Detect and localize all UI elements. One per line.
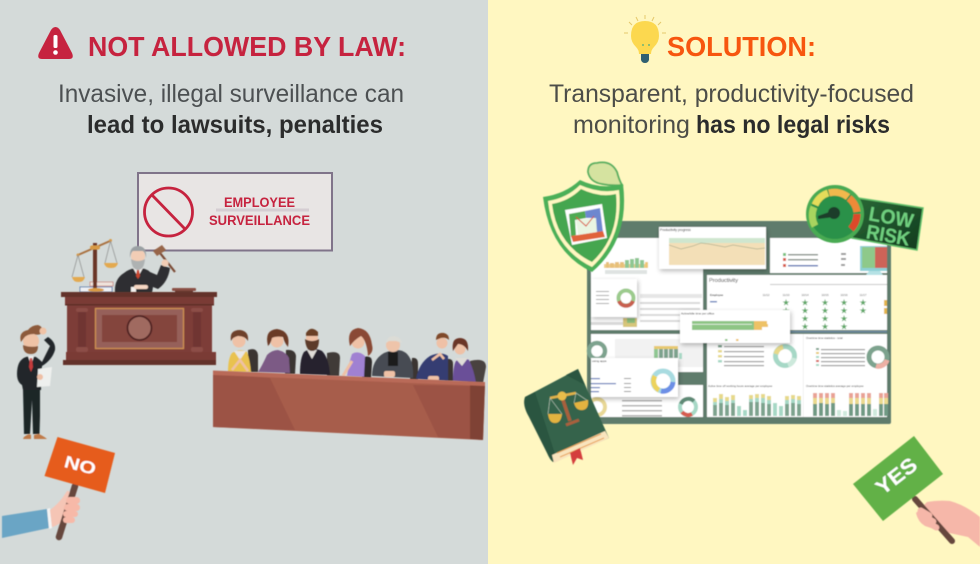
panel: productivity table: ★: [821, 306, 829, 316]
panel: productivity table: 11/12: [763, 293, 770, 297]
illustration: jury members: [228, 328, 486, 383]
panel: productivity table: 10/15: [822, 293, 829, 297]
panel: productivity table: ★: [782, 298, 790, 308]
panel: productivity table: ★: [801, 322, 809, 332]
panel: productivity table: Employee: [710, 293, 724, 297]
panel: productivity table: ★: [821, 314, 829, 324]
panel: productivity table: 11/17: [860, 293, 867, 297]
panel: not allowed by law: [0, 0, 488, 564]
icon: monitor: [860, 246, 887, 275]
illustration: confused man: [17, 325, 55, 439]
panel: productivity table: [707, 275, 887, 334]
panel: lower right charts: Active time off working hours average per employee: [708, 384, 773, 388]
sign: no: [2, 437, 115, 538]
sign: yes: YES: [871, 453, 922, 500]
badge: low risk: RISK: [864, 221, 912, 251]
icon: gold scales: [548, 392, 588, 425]
sign: employee surveillance: [138, 173, 332, 250]
sign: employee surveillance: EMPLOYEE: [224, 195, 295, 210]
text: transparent monitoring: Transparent, productivity-focused: [549, 80, 914, 108]
panel: productivity table: ★: [859, 298, 867, 308]
panel: lower right charts: [707, 334, 887, 417]
panel: solution: [488, 0, 980, 564]
panel: productivity table: ★: [801, 306, 809, 316]
panel: lower right charts: Overtime time statistics average per employee: [806, 384, 864, 388]
panel: productivity table: ★: [840, 322, 848, 332]
card: working apps: [591, 358, 678, 397]
card: donut summary: [591, 279, 637, 317]
panel: productivity table: 11/10: [783, 293, 790, 297]
panel: productivity table: Productivity: [709, 278, 738, 284]
text: monitoring: monitoring: [573, 111, 690, 139]
panel: productivity table: ★: [859, 306, 867, 316]
panel: top right metrics: [770, 238, 887, 273]
bar chart: active time off working hours: [715, 394, 799, 416]
icon: light bulb: [624, 15, 666, 63]
heading: not allowed by law: NOT ALLOWED BY LAW:: [88, 31, 406, 62]
icon: warning triangle: [38, 27, 73, 59]
panel: productivity table: ★: [801, 298, 809, 308]
icon: law book: [524, 369, 609, 465]
icon: scales of justice: [72, 239, 118, 292]
panel: productivity table: ★: [821, 298, 829, 308]
text: invasive surveillance: Invasive, illegal surveillance can: [58, 80, 404, 108]
card: productivity progress: [659, 227, 766, 269]
heading: solution: SOLUTION:: [667, 31, 816, 62]
panel: activity overview: [591, 238, 703, 330]
panel: productivity table: 10/14: [802, 293, 809, 297]
icon: shield with logo: [543, 162, 624, 272]
badge: low risk: LOW: [867, 203, 915, 233]
panel: lower right charts: Overtime time statistics - total: [806, 336, 843, 340]
card: working apps: using apps: [592, 359, 607, 363]
sign: yes: [853, 436, 980, 547]
card: active time per office: [680, 310, 790, 343]
panel: productivity table: ★: [840, 314, 848, 324]
card: active time per office: Active/idle time per office: [681, 312, 715, 316]
illustration: judge: [115, 245, 175, 293]
badge: low risk: [806, 185, 923, 251]
panel: productivity table: ★: [801, 314, 809, 324]
dashboard collage: [587, 221, 891, 424]
panel: productivity table: ★: [840, 306, 848, 316]
panel: productivity table: ★: [782, 306, 790, 316]
card: productivity progress: Productivity progress: [660, 228, 691, 232]
panel: productivity table: ★: [821, 322, 829, 332]
text: no legal risks: has no legal risks: [696, 111, 890, 139]
sign: employee surveillance: SURVEILLANCE: [209, 213, 310, 228]
text: lawsuits and penalties: lead to lawsuits, penalties: [87, 111, 383, 139]
bar chart: overtime statistics: [815, 393, 886, 416]
illustration: jury desk: [213, 370, 485, 440]
sign: no: NO: [62, 452, 98, 479]
panel: productivity table: ★: [840, 298, 848, 308]
illustration: judge bench: [61, 288, 217, 365]
panel: lower left charts: [589, 334, 703, 417]
panel: productivity table: 10/16: [840, 293, 848, 297]
